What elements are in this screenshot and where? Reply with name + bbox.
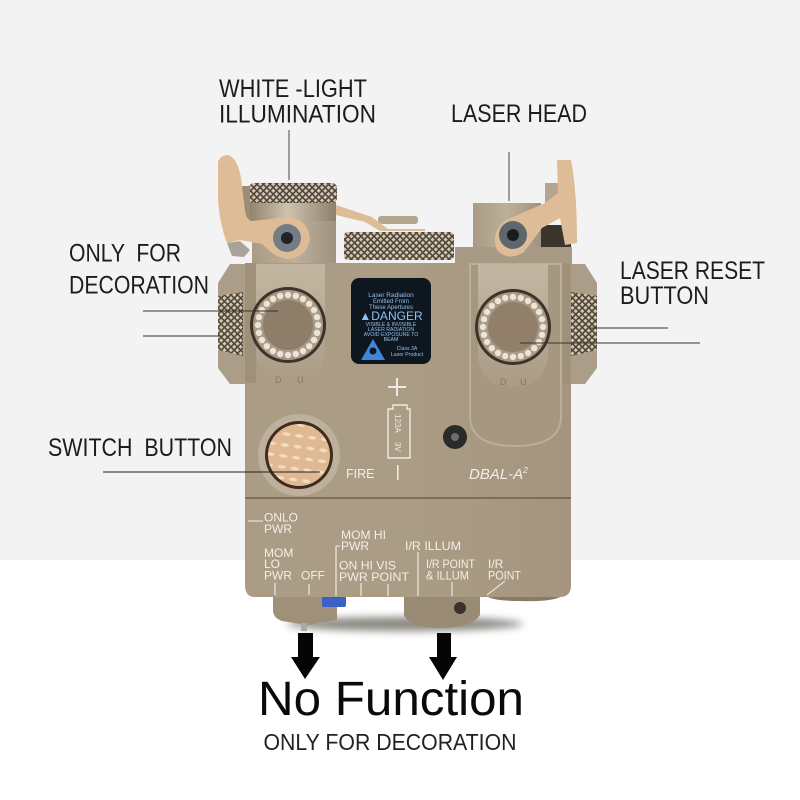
label: laser reset button xyxy=(620,257,765,310)
selector labels xyxy=(248,510,522,596)
selector labels: I/R POINT xyxy=(426,557,476,571)
plus sign xyxy=(388,378,406,396)
bottom protrusions xyxy=(273,595,560,631)
label: white-light illumination: ILLUMINATION xyxy=(219,100,376,128)
left lever lower tab xyxy=(227,241,250,257)
icon: left hex screw xyxy=(273,224,301,252)
right dial with guard xyxy=(470,264,561,446)
center lever and knob xyxy=(336,205,454,260)
left lever xyxy=(218,155,310,259)
danger label: BEAM xyxy=(384,337,398,343)
label: white-light illumination xyxy=(219,75,376,128)
right block and flange xyxy=(455,183,572,264)
selector labels: MOM HI xyxy=(341,528,386,542)
leader line: laser reset lower xyxy=(520,342,700,344)
leader line: laser reset upper xyxy=(590,327,668,329)
leader line: decoration lower xyxy=(143,335,219,337)
danger label: Class 3A xyxy=(397,346,418,352)
right dial with guard: D xyxy=(500,377,507,387)
danger label: LASER RADIATION xyxy=(368,327,414,333)
FIRE label: FIRE xyxy=(346,467,374,481)
label: white-light illumination: WHITE -LIGHT xyxy=(219,75,367,103)
heading: no function: No Function xyxy=(258,673,524,726)
danger label: VISIBLE & INVISIBLE xyxy=(366,322,417,328)
leader line: decoration upper xyxy=(143,310,278,312)
selector labels: LO xyxy=(264,557,280,571)
main body xyxy=(245,263,571,597)
selector labels: I/R xyxy=(488,557,504,571)
left top knob xyxy=(240,183,337,264)
selector labels: PWR xyxy=(264,568,292,582)
danger label: ▲DANGER xyxy=(359,309,423,323)
arrow: right xyxy=(429,633,457,680)
danger label: AVOID EXPOSURE TO xyxy=(364,332,418,338)
leader line: laser head xyxy=(508,152,510,201)
side rails xyxy=(245,263,570,383)
battery icon xyxy=(388,405,410,458)
label: laser reset button: LASER RESET xyxy=(620,257,765,285)
right dial with guard: U xyxy=(520,377,526,387)
label: switch button: SWITCH BUTTON xyxy=(48,434,232,462)
label: only for decoration xyxy=(69,240,209,300)
ground shadow xyxy=(287,617,523,631)
side wings and knurled side knobs xyxy=(218,264,597,384)
selector labels: ON HI VIS xyxy=(339,558,396,572)
DBAL-A2 logo: DBAL-A xyxy=(469,466,523,483)
danger label: Laser Product xyxy=(391,352,424,358)
selector labels: OFF xyxy=(301,568,325,582)
icon: right hex screw xyxy=(499,221,527,249)
label: only for decoration: ONLY FOR xyxy=(69,240,181,268)
device: DBAL-A2 laser unit xyxy=(218,155,597,680)
icon: body screw xyxy=(443,425,467,449)
danger label: Laser Radiation xyxy=(368,292,414,299)
background panel xyxy=(0,0,800,560)
arrow: left xyxy=(291,633,320,679)
leader line: white light xyxy=(288,130,290,180)
selector labels: PWR xyxy=(264,522,292,536)
subheading: only for decoration: ONLY FOR DECORATION xyxy=(264,729,516,755)
danger label: Emitted From xyxy=(373,299,409,305)
selector labels: & ILLUM xyxy=(426,568,469,582)
label: only for decoration: DECORATION xyxy=(69,272,209,300)
selector labels: MOM xyxy=(264,546,293,560)
leader line: switch button xyxy=(103,471,320,473)
danger label: These Apertures xyxy=(369,305,413,311)
battery icon: 3V xyxy=(393,442,402,452)
left dial xyxy=(250,264,326,385)
left dial: D xyxy=(275,375,282,385)
right lever xyxy=(495,160,577,257)
selector labels: PWR xyxy=(341,539,369,553)
minus sign xyxy=(397,465,399,480)
battery icon: 123A xyxy=(393,414,402,433)
selector labels: PWR POINT xyxy=(339,570,410,584)
selector labels: I/R ILLUM xyxy=(405,539,461,553)
fire button xyxy=(258,414,340,496)
danger label xyxy=(351,278,431,364)
DBAL-A2 logo: 2 xyxy=(522,466,528,475)
selector labels: ONLO xyxy=(264,510,298,524)
body seam xyxy=(245,497,571,499)
selector labels: POINT xyxy=(488,568,522,582)
label: laser head: LASER HEAD xyxy=(451,100,587,128)
left dial: U xyxy=(297,375,304,385)
label: laser reset button: BUTTON xyxy=(620,282,709,310)
